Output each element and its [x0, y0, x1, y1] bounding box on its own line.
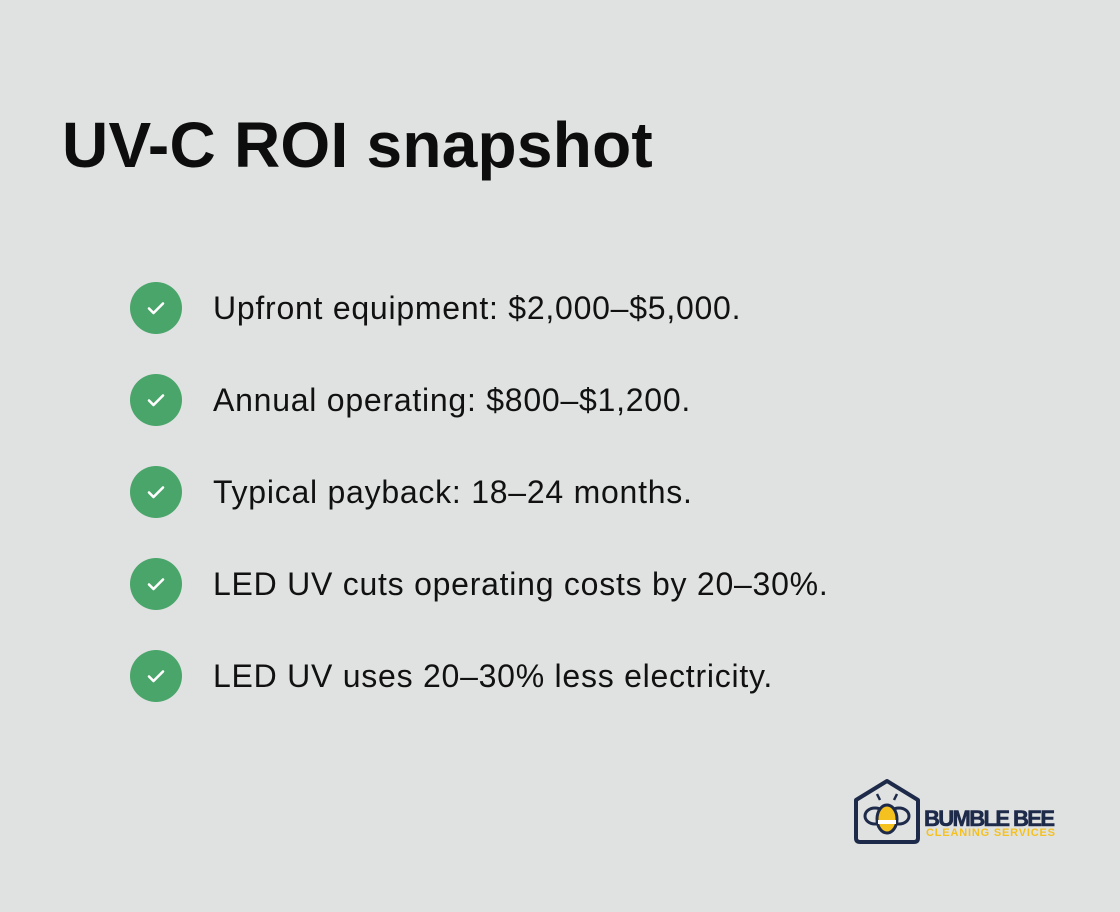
item 2 — [130, 374, 691, 426]
item 1: Upfront equipment: $2,000–$5,000. — [213, 290, 741, 326]
logo text: CLEANING SERVICES — [926, 827, 1055, 839]
item 4 — [130, 558, 828, 610]
logo text: BUMBLE BEE — [924, 806, 1055, 831]
title: UV-C ROI snapshot — [62, 109, 653, 181]
item 1 — [130, 282, 741, 334]
item 5: LED UV uses 20–30% less electricity. — [213, 658, 773, 694]
logo — [854, 779, 1055, 844]
item 3 — [130, 466, 693, 518]
item 3: Typical payback: 18–24 months. — [213, 474, 693, 510]
item 4: LED UV cuts operating costs by 20–30%. — [213, 566, 828, 602]
item 5 — [130, 650, 773, 702]
icon: house with bee — [856, 781, 918, 842]
item 2: Annual operating: $800–$1,200. — [213, 382, 691, 418]
